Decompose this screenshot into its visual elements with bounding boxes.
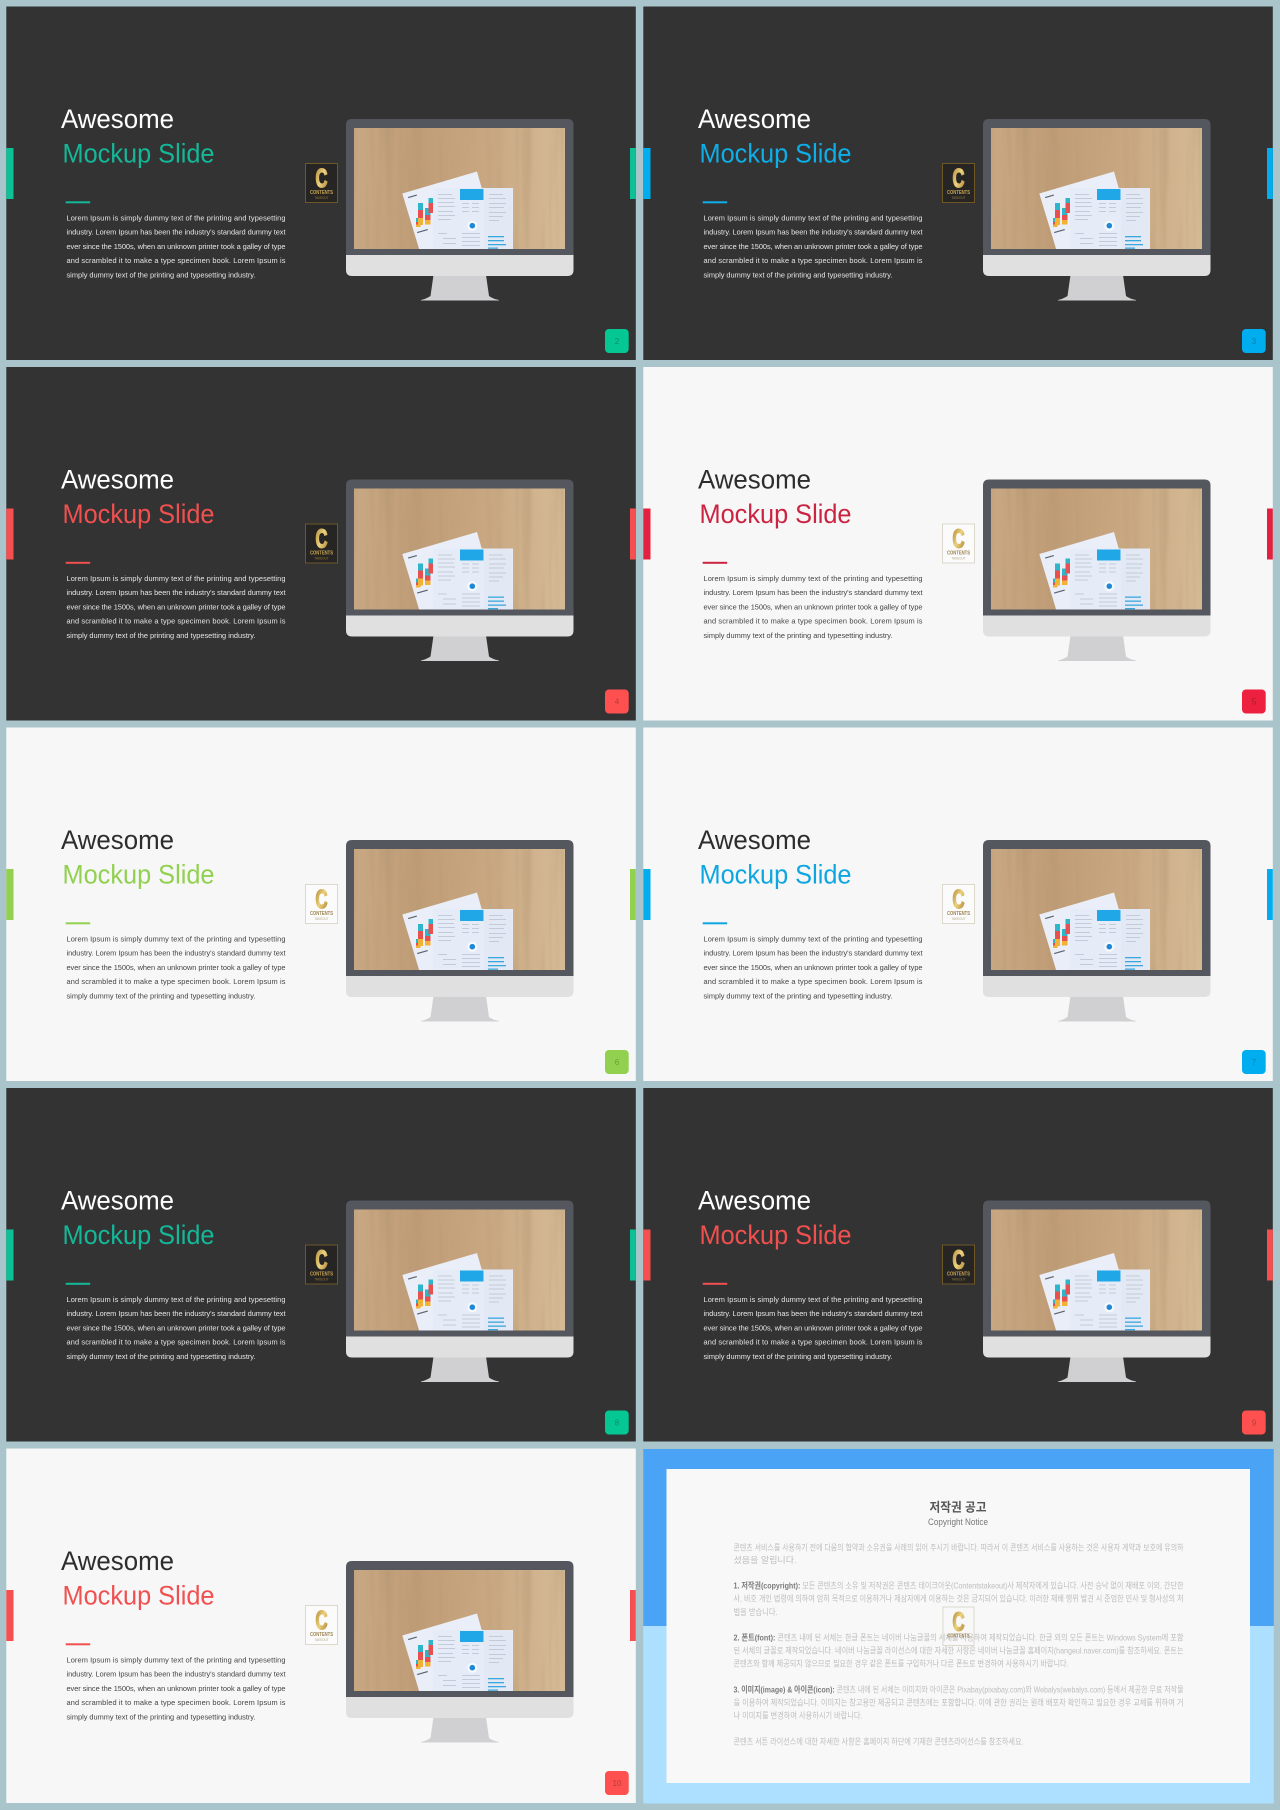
page number badge: 10 xyxy=(613,1779,622,1788)
paragraph 3: image and icon xyxy=(734,1685,1184,1721)
right accent tab xyxy=(630,869,636,920)
accent rule xyxy=(66,562,90,564)
body text: industry. Lorem Ipsum has been the industry's standard dummy text xyxy=(66,1670,286,1679)
icon: logo badge xyxy=(306,1244,338,1284)
heading: Awesome xyxy=(61,825,174,855)
panel: slide 4 dark red xyxy=(6,367,636,720)
paragraph 2: font xyxy=(734,1633,1184,1668)
right accent tab xyxy=(630,1590,636,1641)
heading: Awesome xyxy=(61,104,174,134)
heading: Awesome xyxy=(698,104,811,134)
panel: slide 8 dark teal xyxy=(6,1088,636,1442)
paragraph 3: image and icon: 을 이용하여 제작되었습니다. 이미지는 참고용만 제공되고 콘텐츠에는 포함합니다. 이에 관한 권리는 원래 배포자 확인하고 필요한 경우 교체를 위하여 거 xyxy=(734,1698,1184,1708)
page number badge: 7 xyxy=(1252,1058,1257,1067)
icon: centered logo watermark: CONTENTS xyxy=(948,1634,970,1640)
page number badge xyxy=(1242,690,1266,714)
panel: slide 2 dark teal xyxy=(6,6,636,360)
body text: simply dummy text of the printing and typesetting industry. xyxy=(66,631,256,640)
right accent tab xyxy=(630,148,636,199)
monitor mockup xyxy=(346,840,574,1022)
body text: Lorem Ipsum is simply dummy text of the printing and typesetting xyxy=(704,1295,922,1304)
left accent tab xyxy=(6,1590,14,1641)
left accent tab xyxy=(643,508,650,560)
body text: ever since the 1500s, when an unknown printer took a galley of type xyxy=(704,963,922,972)
body text: Lorem Ipsum is simply dummy text of the printing and typesetting xyxy=(66,934,286,944)
body text: and scrambled it to make a type specimen book. Lorem Ipsum is xyxy=(704,616,923,626)
body text: simply dummy text of the printing and typesetting industry. xyxy=(704,1352,892,1361)
heading: Mockup Slide xyxy=(62,860,214,890)
left accent tab xyxy=(643,1230,650,1280)
left accent tab xyxy=(6,1230,14,1280)
panel: slide 3 dark blue xyxy=(643,6,1273,360)
body text xyxy=(704,574,923,640)
page number badge xyxy=(605,329,629,353)
page number badge xyxy=(1242,329,1266,353)
body text: simply dummy text of the printing and typesetting industry. xyxy=(66,1712,256,1721)
icon: centered logo watermark xyxy=(943,1606,974,1646)
right accent tab xyxy=(1267,148,1273,199)
body text: industry. Lorem Ipsum has been the industry's standard dummy text xyxy=(704,228,922,237)
heading: Mockup Slide xyxy=(62,138,214,168)
accent rule xyxy=(66,1643,90,1645)
accent rule xyxy=(703,201,727,203)
paragraph 1: copyright: 사, 비호 개인 법령에 의하여 엄히 목적으로 이용하거나 제삼자에게 이용하는 것은 금지되어 있습니다. 이러한 재배 행위 발견 시 준엄한 민사 및 형사상의 처 xyxy=(734,1594,1184,1604)
icon: logo badge xyxy=(942,1244,974,1284)
notice subheading: Copyright Notice xyxy=(928,1517,988,1527)
icon: logo badge xyxy=(942,163,974,202)
heading: Mockup Slide xyxy=(700,499,852,529)
body text: and scrambled it to make a type specimen book. Lorem Ipsum is xyxy=(66,1698,286,1707)
body text xyxy=(704,934,923,1000)
icon: logo badge xyxy=(306,163,338,202)
accent rule xyxy=(703,922,727,924)
body text: ever since the 1500s, when an unknown printer took a galley of type xyxy=(66,242,286,251)
accent rule xyxy=(66,201,90,203)
heading: Awesome xyxy=(61,464,174,494)
left accent tab xyxy=(6,508,14,560)
left accent tab xyxy=(6,148,14,199)
monitor mockup xyxy=(983,1200,1210,1382)
monitor mockup xyxy=(346,480,574,661)
closing line: 콘텐츠 서튼 라이선스에 대한 자세한 사항은 홈페이지 하단에 기재한 콘텐츠라이선스를 참조하세요. xyxy=(734,1737,1024,1747)
panel: slide 9 dark red xyxy=(643,1088,1273,1442)
body text xyxy=(66,1295,286,1361)
heading xyxy=(698,1186,852,1250)
page number badge xyxy=(605,690,629,714)
monitor mockup xyxy=(346,1561,574,1742)
body text: ever since the 1500s, when an unknown printer took a galley of type xyxy=(66,963,286,972)
page number badge xyxy=(605,1410,629,1434)
body text: ever since the 1500s, when an unknown printer took a galley of type xyxy=(704,242,922,251)
intro paragraph: 콘텐츠 서비스를 사용하기 전에 다음의 협약과 소유권을 사례의 읽어 주시기 바랍니다. 따라서 이 콘텐츠 서비스를 사용하는 것은 사용자 계약과 보호에 유의하 xyxy=(734,1542,1184,1552)
body text: Lorem Ipsum is simply dummy text of the printing and typesetting xyxy=(66,1295,286,1304)
icon: logo badge xyxy=(942,884,974,924)
page number badge: 5 xyxy=(1252,698,1257,706)
page number badge: 8 xyxy=(615,1418,620,1428)
paragraph 2: font: 된 서체의 글꼴로 제작되었습니다. 네이버 나눔글꼴 라이선스에 대한 자세한 사항은 네이버 나눔글꼴 홈페이지(hangeul.naver.com)를 참조하세요. 폰트는 xyxy=(734,1646,1184,1656)
page number badge: 4 xyxy=(615,698,620,706)
heading: Awesome xyxy=(698,825,811,855)
paragraph 3: image and icon: 나 이미지를 변경하여 사용하시기 바랍니다. xyxy=(734,1711,862,1721)
body text: simply dummy text of the printing and typesetting industry. xyxy=(66,1352,256,1361)
heading xyxy=(698,825,852,890)
heading: Awesome xyxy=(61,1546,174,1576)
page number badge: 3 xyxy=(1252,337,1257,346)
body text: ever since the 1500s, when an unknown printer took a galley of type xyxy=(704,602,922,611)
accent rule xyxy=(66,922,90,924)
heading xyxy=(61,1186,214,1250)
body text: Lorem Ipsum is simply dummy text of the printing and typesetting xyxy=(704,574,922,583)
paragraph 1: copyright: 벌을 받습니다. xyxy=(734,1607,778,1617)
body text: and scrambled it to make a type specimen book. Lorem Ipsum is xyxy=(66,1338,286,1346)
heading: Mockup Slide xyxy=(62,1220,214,1250)
heading: Mockup Slide xyxy=(62,1580,214,1610)
page number badge xyxy=(1242,1410,1266,1434)
page number badge xyxy=(605,1050,629,1074)
body text: Lorem Ipsum is simply dummy text of the printing and typesetting xyxy=(66,574,286,583)
intro paragraph xyxy=(734,1542,1184,1565)
page number badge xyxy=(1242,1050,1266,1074)
page number badge xyxy=(605,1771,629,1795)
paragraph 2: font: 콘텐츠와 함께 제공되지 않으므로 필요한 경우 같은 폰트를 구입하거나 다른 폰트로 변경하여 사용하시기 바랍니다. xyxy=(734,1658,1068,1668)
monitor mockup xyxy=(346,1200,574,1382)
body text xyxy=(66,934,286,1000)
heading xyxy=(61,825,214,890)
body text: Lorem Ipsum is simply dummy text of the printing and typesetting xyxy=(66,1656,286,1664)
body text: industry. Lorem Ipsum has been the industry's standard dummy text xyxy=(704,1309,922,1318)
heading xyxy=(61,1546,214,1610)
right accent tab xyxy=(630,508,636,560)
accent rule xyxy=(703,562,727,564)
page number badge: 9 xyxy=(1252,1418,1257,1428)
body text xyxy=(66,574,286,640)
icon: logo badge xyxy=(306,1605,338,1644)
paragraph 3: image and icon: 3. 이미지(image) & 아이콘(icon): 콘텐츠 내에 된 서체는 이미지와 아이콘은 Pixabay(pixabay.com)와 Webalys(webalys.com) 등에서 제공한 무료 저작물 xyxy=(734,1685,1184,1695)
body text xyxy=(66,1656,286,1721)
right accent tab xyxy=(1267,508,1273,560)
right accent tab xyxy=(630,1230,636,1280)
body text: industry. Lorem Ipsum has been the industry's standard dummy text xyxy=(66,949,286,958)
page number badge: 2 xyxy=(615,337,620,346)
monitor mockup xyxy=(346,119,574,300)
panel: slide 7 light blue xyxy=(643,728,1273,1081)
body text: and scrambled it to make a type specimen book. Lorem Ipsum is xyxy=(704,977,923,986)
body text: Lorem Ipsum is simply dummy text of the printing and typesetting xyxy=(66,214,286,222)
body text: ever since the 1500s, when an unknown printer took a galley of type xyxy=(66,1323,286,1332)
body text: ever since the 1500s, when an unknown printer took a galley of type xyxy=(66,602,286,611)
right accent tab xyxy=(1267,869,1273,920)
heading: Mockup Slide xyxy=(62,499,214,529)
body text: Lorem Ipsum is simply dummy text of the printing and typesetting xyxy=(704,934,922,944)
panel: slide 10 light red xyxy=(6,1448,636,1803)
paragraph 2: font: 2. 폰트(font): 콘텐츠 내에 된 서체는 한글 폰트는 네이버 나눔글꼴의 서체를 사용하여 제작되었습니다. 한글 외의 모든 폰트는 Windows System에 포함 xyxy=(734,1633,1184,1643)
heading xyxy=(61,464,214,529)
body text xyxy=(704,1295,923,1361)
body text: and scrambled it to make a type specimen book. Lorem Ipsum is xyxy=(704,1338,923,1346)
body text: industry. Lorem Ipsum has been the industry's standard dummy text xyxy=(704,949,922,958)
heading: Mockup Slide xyxy=(700,860,852,890)
left accent tab xyxy=(643,869,650,920)
heading: Mockup Slide xyxy=(700,138,852,168)
accent rule xyxy=(703,1283,727,1285)
body text: simply dummy text of the printing and typesetting industry. xyxy=(66,270,256,279)
body text: Lorem Ipsum is simply dummy text of the printing and typesetting xyxy=(704,214,922,222)
body text: industry. Lorem Ipsum has been the industry's standard dummy text xyxy=(704,588,922,597)
body text: ever since the 1500s, when an unknown printer took a galley of type xyxy=(66,1684,286,1693)
body text: and scrambled it to make a type specimen book. Lorem Ipsum is xyxy=(66,256,286,265)
body text: simply dummy text of the printing and typesetting industry. xyxy=(704,991,892,1000)
monitor mockup xyxy=(983,840,1210,1022)
heading: Awesome xyxy=(698,1186,811,1216)
paragraph 1: copyright: 1. 저작권(copyright): 모든 콘텐츠의 소유 및 저작권은 콘텐츠 테이크아웃(Contentstakeout)사 제작자에게 있습니다. 사전 승낙 없이 재배포 이외, 간단한 xyxy=(734,1581,1184,1591)
body text xyxy=(66,214,286,279)
panel: slide 5 light crimson xyxy=(643,367,1273,720)
panel: copyright notice xyxy=(643,1449,1274,1804)
body text: industry. Lorem Ipsum has been the industry's standard dummy text xyxy=(66,1309,286,1318)
body text: simply dummy text of the printing and typesetting industry. xyxy=(704,270,892,279)
icon: logo badge xyxy=(306,884,338,924)
icon: centered logo watermark: C xyxy=(952,1606,965,1636)
monitor mockup xyxy=(983,480,1210,661)
accent rule xyxy=(66,1283,90,1285)
paragraph 1: copyright xyxy=(734,1581,1184,1617)
heading xyxy=(698,104,852,168)
page number badge: 6 xyxy=(615,1058,620,1067)
body text: industry. Lorem Ipsum has been the industry's standard dummy text xyxy=(66,588,286,597)
intro paragraph: 셨음을 알립니다. xyxy=(734,1555,796,1565)
heading: Awesome xyxy=(698,464,811,494)
body text: and scrambled it to make a type specimen book. Lorem Ipsum is xyxy=(704,256,923,265)
notice heading: 저작권 공고 xyxy=(930,1500,986,1514)
heading: Awesome xyxy=(61,1186,174,1216)
heading: Mockup Slide xyxy=(700,1220,852,1250)
right accent tab xyxy=(1267,1230,1273,1280)
left accent tab xyxy=(6,869,14,920)
monitor mockup xyxy=(983,119,1210,300)
body text: and scrambled it to make a type specimen book. Lorem Ipsum is xyxy=(66,977,286,986)
body text xyxy=(704,214,923,279)
body text: simply dummy text of the printing and typesetting industry. xyxy=(704,631,892,640)
body text: industry. Lorem Ipsum has been the industry's standard dummy text xyxy=(66,228,286,237)
heading xyxy=(61,104,214,168)
left accent tab xyxy=(643,148,650,199)
body text: and scrambled it to make a type specimen book. Lorem Ipsum is xyxy=(66,616,286,626)
heading xyxy=(698,464,852,529)
panel: slide 6 light green xyxy=(6,728,636,1081)
body text: ever since the 1500s, when an unknown printer took a galley of type xyxy=(704,1323,922,1332)
icon: logo badge xyxy=(306,524,338,563)
body text: simply dummy text of the printing and typesetting industry. xyxy=(66,991,256,1000)
icon: logo badge xyxy=(942,524,974,563)
